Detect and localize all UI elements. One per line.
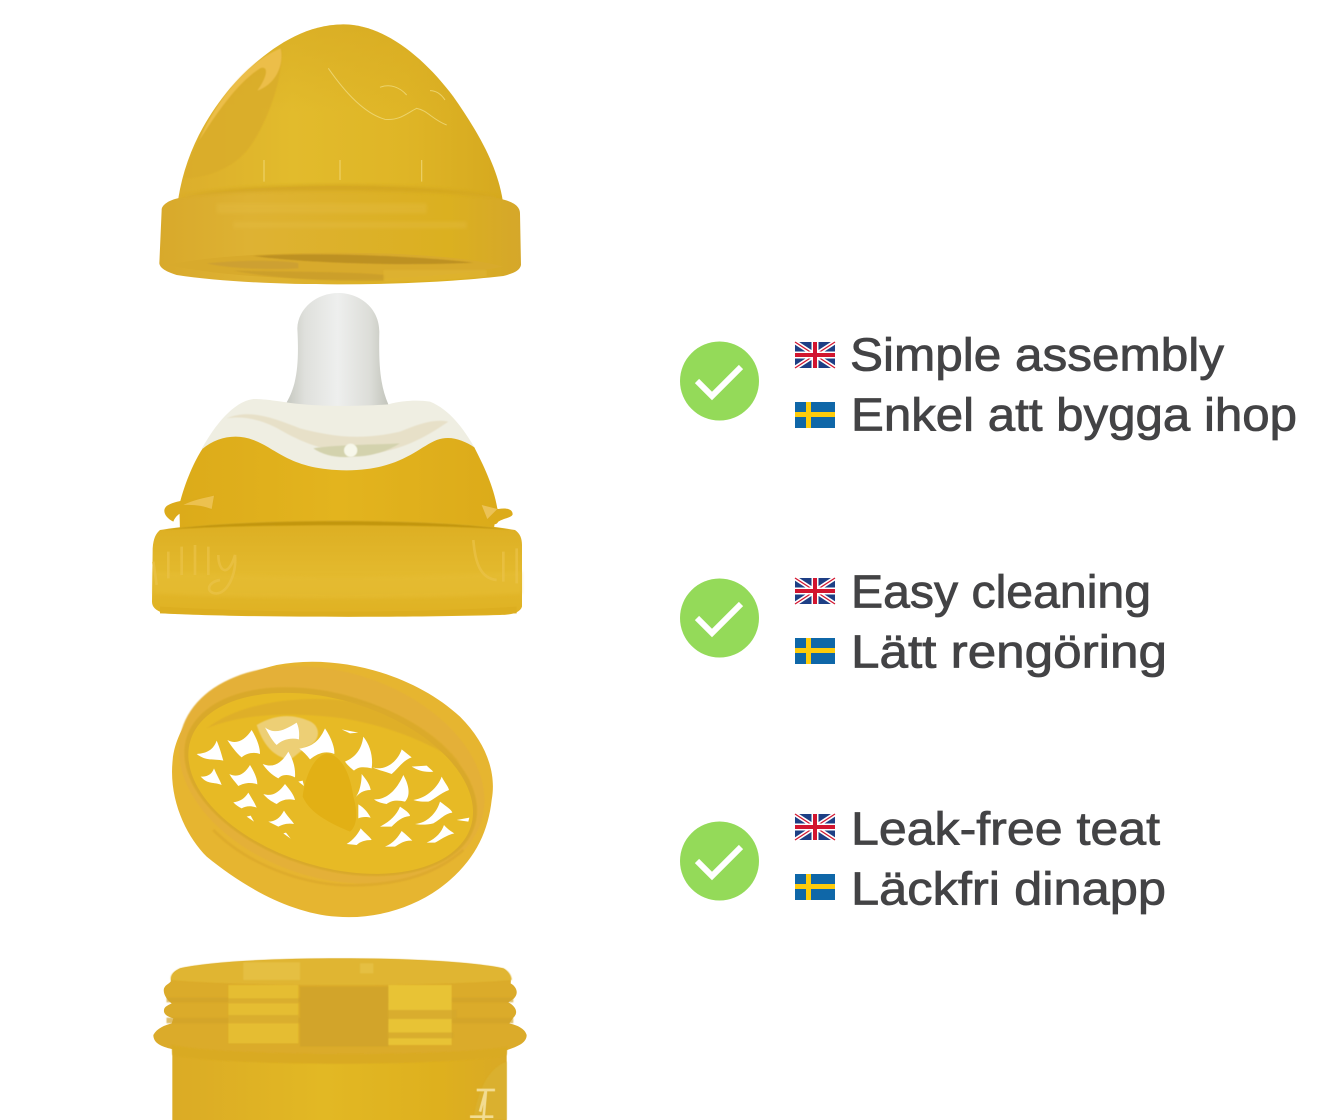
icon: UK flag bbox=[795, 814, 835, 840]
illustration: screw cap bbox=[159, 24, 521, 284]
label: Swedish: Läckfri dinapp bbox=[851, 862, 1166, 914]
label: English: Simple assembly bbox=[850, 328, 1224, 380]
icon: Swedish flag bbox=[795, 874, 835, 900]
icon: Swedish flag bbox=[795, 402, 835, 428]
feature: simple assembly bbox=[680, 328, 1297, 440]
label: Swedish: Lätt rengöring bbox=[851, 626, 1167, 678]
label: English: Easy cleaning bbox=[851, 566, 1151, 618]
icon: green check bbox=[680, 342, 759, 420]
threaded band bbox=[152, 520, 522, 617]
embossed mark bbox=[470, 1090, 495, 1120]
central stem bbox=[303, 753, 356, 832]
lugs bbox=[164, 495, 215, 522]
icon: green check bbox=[680, 822, 759, 900]
illustration: bottle neck bbox=[153, 958, 527, 1120]
icon: Swedish flag bbox=[795, 638, 835, 664]
teat bbox=[287, 293, 388, 445]
label: English: Leak-free teat bbox=[851, 802, 1160, 854]
illustration: silicone teat with collar bbox=[152, 293, 522, 617]
embossed logo bbox=[153, 545, 235, 593]
illustration: valve disc bbox=[152, 630, 512, 920]
icon: green check bbox=[680, 578, 759, 658]
feature: leak-free teat bbox=[680, 802, 1166, 914]
icon: UK flag bbox=[795, 342, 835, 368]
perforations bbox=[197, 723, 469, 847]
feature: easy cleaning bbox=[680, 566, 1167, 678]
flange bbox=[202, 399, 475, 477]
icon: UK flag bbox=[795, 578, 835, 604]
label: Swedish: Enkel att bygga ihop bbox=[851, 388, 1297, 440]
collar dome bbox=[179, 437, 497, 532]
lower rim detail bbox=[213, 830, 463, 885]
